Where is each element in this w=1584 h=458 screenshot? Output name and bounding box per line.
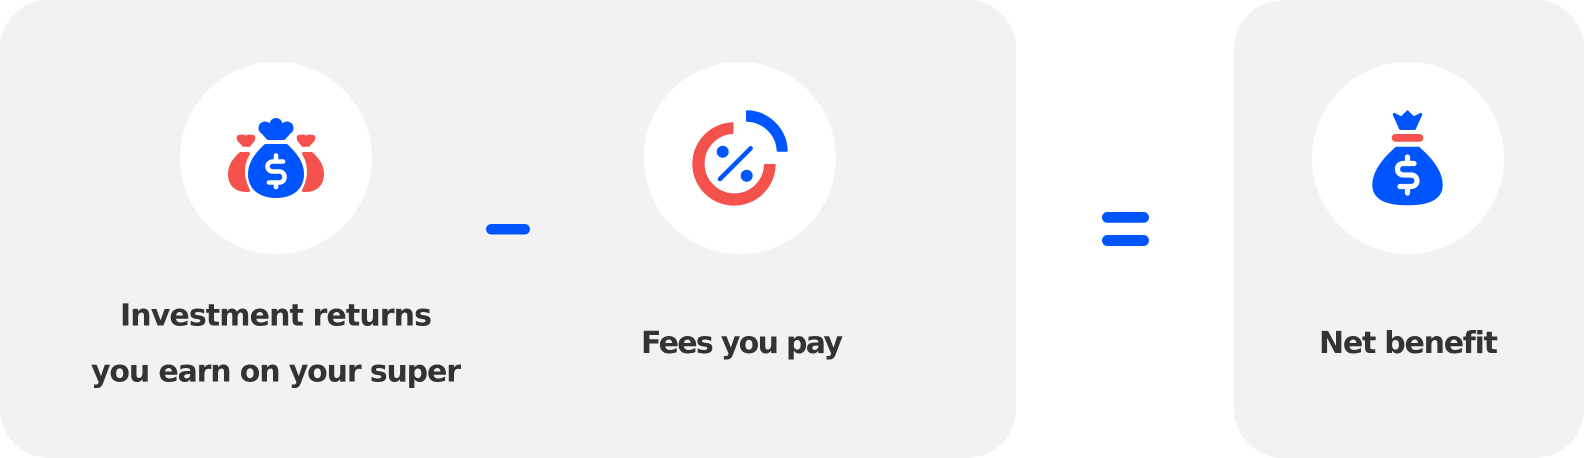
- heading: investment returns: you earn on your super: [91, 354, 461, 390]
- icon: three money bags: [180, 62, 372, 254]
- heading: fees you pay: Fees you pay: [641, 326, 843, 361]
- icon: percentage with ring: [644, 62, 836, 254]
- operator: minus: [486, 224, 530, 234]
- panel: net benefit: [1234, 0, 1584, 458]
- panel: returns and fees: [0, 0, 1016, 458]
- operator: equals: [1102, 212, 1149, 246]
- heading: investment returns: Investment returns: [120, 298, 432, 334]
- heading: investment returns: [91, 298, 461, 390]
- icon: money bag: [1312, 62, 1504, 254]
- heading: net benefit: Net benefit: [1319, 326, 1498, 361]
